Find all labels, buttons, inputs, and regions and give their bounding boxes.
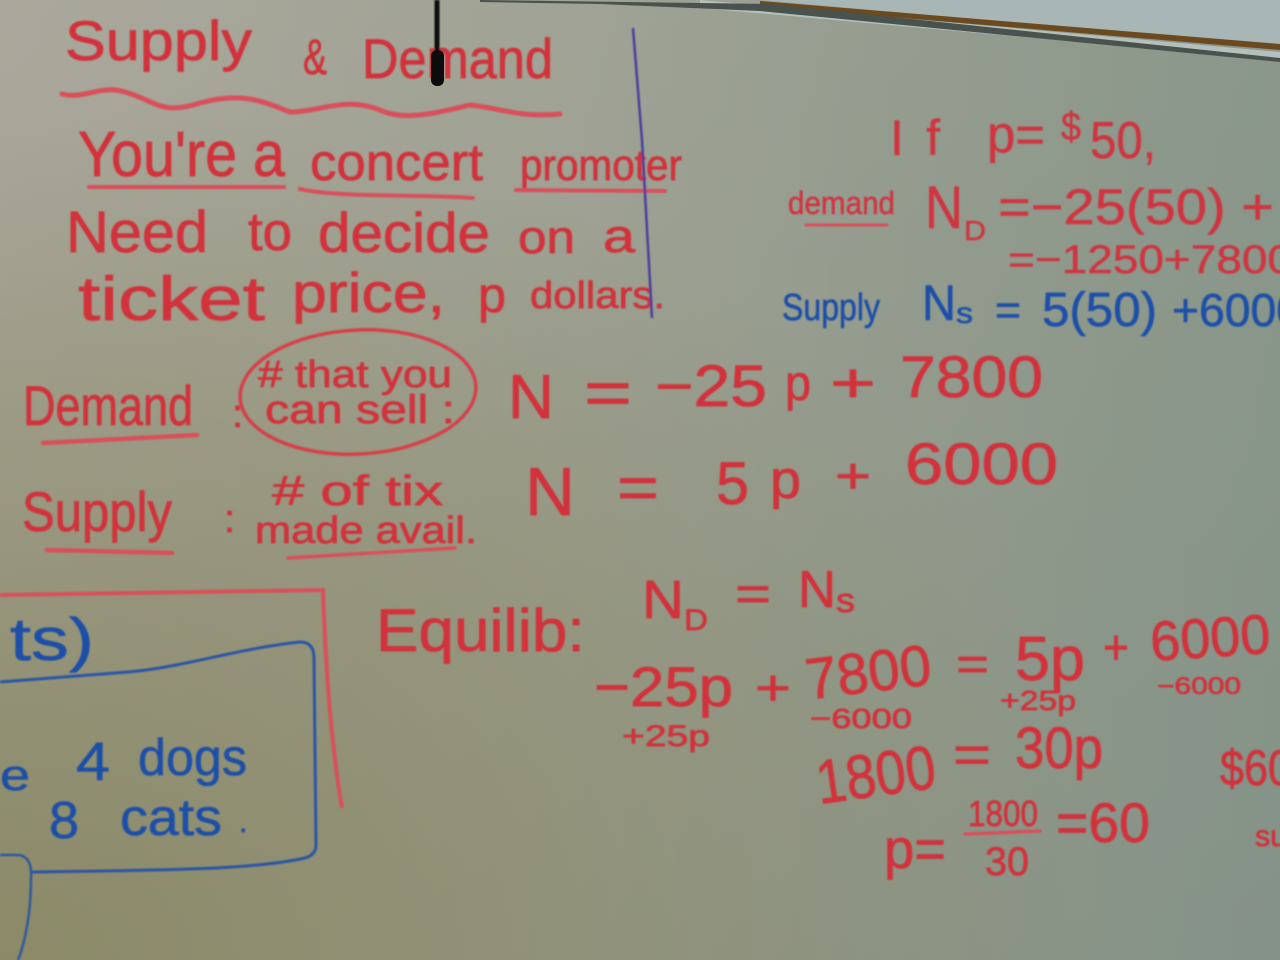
word problem text [0, 729, 247, 850]
subtraction annotations [622, 673, 1241, 753]
demand calculation: =−25(50) + [998, 179, 1274, 235]
equilibrium equation: + [1103, 622, 1129, 675]
if p = 50 heading: If [890, 110, 940, 166]
supply equation: N [525, 454, 575, 530]
title: Supply [65, 9, 252, 72]
if p = 50 heading [890, 105, 1156, 170]
intro text: ticket price: p [478, 267, 506, 323]
equilibrium heading: D [684, 604, 708, 637]
supply calculation: N [922, 275, 956, 331]
supply definition [255, 467, 477, 558]
supply calculation: s [956, 297, 973, 330]
demand calculation [788, 174, 1280, 282]
price solution: 1800 [968, 793, 1038, 834]
simplified equation: 30p [1015, 716, 1103, 781]
word problem text: e [0, 751, 30, 800]
demand calculation: D [964, 215, 986, 246]
demand definition ellipse: # that you [258, 354, 452, 396]
demand equation: p [785, 355, 811, 411]
demand equation [508, 345, 1043, 432]
if p = 50 heading: $ [1061, 105, 1081, 149]
simplified equation: 1800 [812, 733, 940, 818]
demand calculation: demand [788, 185, 895, 221]
demand label: Demand [23, 374, 193, 437]
simplified equation: = [953, 726, 991, 784]
if p = 50 heading: 50, [1090, 112, 1156, 170]
intro text: ticket price: price, [292, 261, 445, 324]
supply definition: # of tix [272, 467, 443, 514]
intro text: decide: to [248, 202, 292, 262]
demand equation: N [508, 363, 554, 432]
supply definition: made avail. [255, 510, 477, 552]
equilibrium heading: N [798, 561, 836, 619]
price solution: 30 [985, 840, 1029, 884]
equilibrium equation: 5p [1015, 625, 1085, 694]
equilibrium heading [376, 561, 855, 664]
purple vertical line [633, 28, 652, 318]
title [65, 9, 553, 90]
demand calculation: =−1250+7800 [1008, 238, 1280, 282]
intro text: ticket price: ticket [78, 265, 265, 334]
equilibrium equation: −25p [594, 655, 733, 718]
intro text: decide: decide [318, 201, 490, 264]
intro text: ticket price [78, 261, 665, 334]
price solution: =60 [1056, 791, 1150, 854]
intro text: decide [66, 200, 636, 265]
word problem text: dogs [138, 729, 247, 787]
simplified equation [812, 716, 1103, 818]
supply equation: + [835, 448, 871, 504]
supply label [22, 480, 235, 553]
microphone cable [434, 0, 440, 70]
equilibrium equation: + [755, 660, 791, 716]
intro text: decide: on [518, 211, 575, 263]
equilibrium heading: s [836, 582, 855, 620]
supply calculation: Supply [782, 287, 880, 329]
supply label: Supply [22, 480, 172, 543]
demand calculation: N [925, 174, 963, 241]
subtraction annotations: +25p [622, 720, 710, 753]
supply equation: p [770, 450, 801, 510]
supply equation: 5 [716, 450, 749, 517]
equilibrium heading: N [642, 570, 684, 630]
title wavy underline [62, 90, 560, 116]
equilibrium equation: = [956, 638, 989, 690]
equilibrium equation [594, 602, 1272, 718]
demand equation: = [584, 359, 632, 428]
intro text: ticket price: dollars. [530, 275, 665, 317]
equilibrium equation: 7800 [802, 633, 935, 712]
supply calculation: = [995, 286, 1021, 335]
partial text in red box: ts) [10, 606, 94, 673]
price solution: p= [884, 817, 946, 880]
intro text: role: promoter [520, 141, 682, 190]
demand equation: 7800 [900, 345, 1043, 410]
subtraction annotations: +25p [1000, 685, 1076, 716]
intro text: role: concert [310, 134, 484, 192]
intro text: decide: a [603, 210, 636, 262]
demand equation: −25 [655, 354, 767, 419]
equilibrium heading: Equilib: [376, 597, 585, 664]
supply equation: 6000 [905, 432, 1058, 497]
red box outline [0, 590, 342, 808]
word problem text: 8 [49, 792, 79, 850]
blue box outline [0, 642, 316, 872]
demand label: : [232, 392, 243, 436]
supply calculation: 5(50) [1042, 284, 1157, 337]
intro text: role: You're a [78, 118, 285, 190]
title: & [303, 29, 327, 85]
word problem text: cats [120, 789, 222, 847]
equilibrium equation: 6000 [1148, 602, 1272, 673]
subtraction annotations: −6000 [810, 703, 912, 734]
demand definition ellipse [237, 324, 479, 460]
equilibrium heading: = [735, 568, 771, 621]
demand equation: + [830, 351, 876, 414]
subtraction annotations: −6000 [1157, 673, 1241, 700]
intro text: decide: Need [66, 200, 208, 265]
intro text: role [78, 118, 682, 198]
title: Demand [362, 27, 553, 90]
price solution [884, 791, 1150, 884]
supply equation [525, 432, 1058, 530]
word problem text: 4 [76, 732, 110, 792]
word problem text: . [239, 806, 247, 839]
whiteboard top frame [480, 0, 1280, 62]
if p = 50 heading: p= [987, 106, 1045, 164]
inner blue box outline [0, 855, 31, 960]
supply label: : [224, 497, 235, 541]
right edge price note [1220, 740, 1280, 853]
supply calculation [782, 275, 1280, 337]
demand definition ellipse: can sell : [265, 388, 455, 432]
microphone head [431, 50, 444, 86]
supply equation: = [617, 454, 659, 521]
